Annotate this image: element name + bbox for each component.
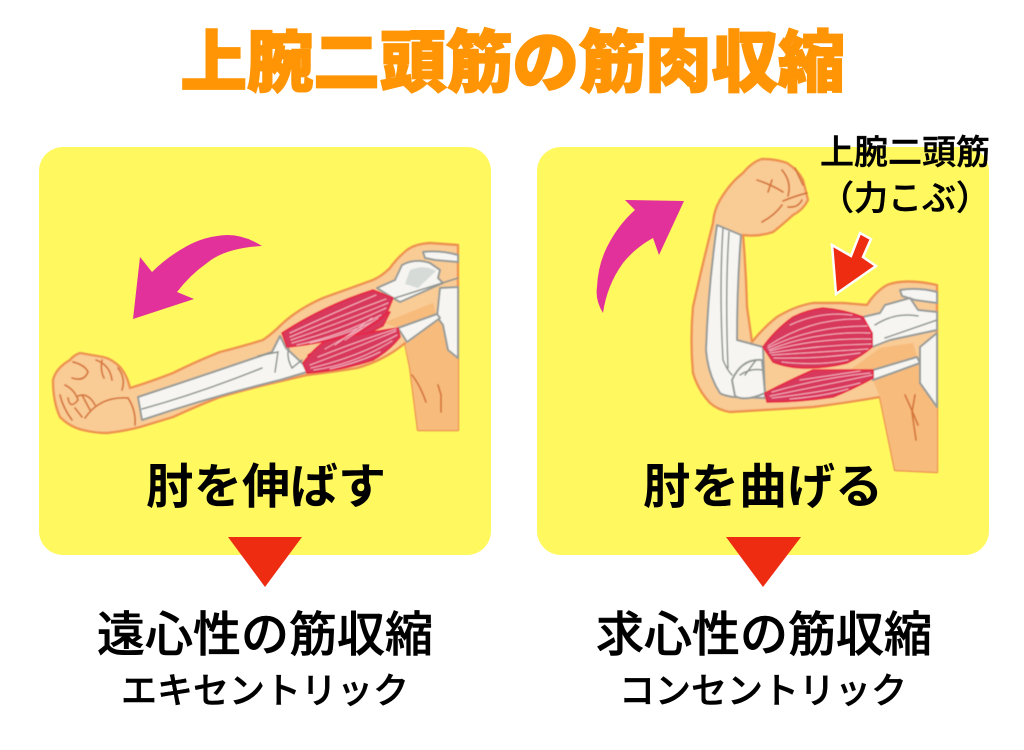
illustration: flexed arm bbox=[692, 159, 937, 472]
label: biceps: 上腕二頭筋 bbox=[820, 134, 990, 172]
illustration: extended arm bbox=[53, 243, 458, 433]
label: biceps: （力こぶ） bbox=[820, 180, 990, 218]
bones of shoulder bbox=[377, 251, 458, 358]
text: extend elbow: 肘を伸ばす bbox=[146, 461, 386, 514]
text: concentric contraction: 求心性の筋収縮 bbox=[596, 609, 932, 662]
text: eccentric contraction: 遠心性の筋収縮 bbox=[97, 609, 433, 662]
text: eccentric contraction bbox=[97, 609, 433, 711]
text: eccentric contraction: エキセントリック bbox=[121, 670, 409, 711]
label: biceps bbox=[820, 134, 990, 218]
bones of shoulder bbox=[850, 289, 937, 407]
bones of forearm bbox=[138, 336, 307, 420]
text: flex elbow: 肘を曲げる bbox=[643, 461, 883, 514]
triangle: left result bbox=[228, 537, 302, 587]
text: concentric contraction bbox=[596, 609, 932, 711]
text: concentric contraction: コンセントリック bbox=[619, 670, 907, 711]
biceps muscle bbox=[763, 308, 873, 402]
arrow: upward motion bbox=[597, 200, 684, 313]
triangle: right result bbox=[726, 537, 801, 587]
title: 上腕二頭筋の筋肉収縮 bbox=[180, 26, 844, 101]
arrow: points to biceps bbox=[832, 233, 876, 294]
panel: extend elbow bbox=[39, 147, 491, 555]
arrow: downward motion bbox=[133, 235, 262, 319]
biceps muscle bbox=[282, 290, 400, 373]
bones of forearm bbox=[706, 225, 765, 398]
panel: flex elbow bbox=[537, 147, 989, 555]
